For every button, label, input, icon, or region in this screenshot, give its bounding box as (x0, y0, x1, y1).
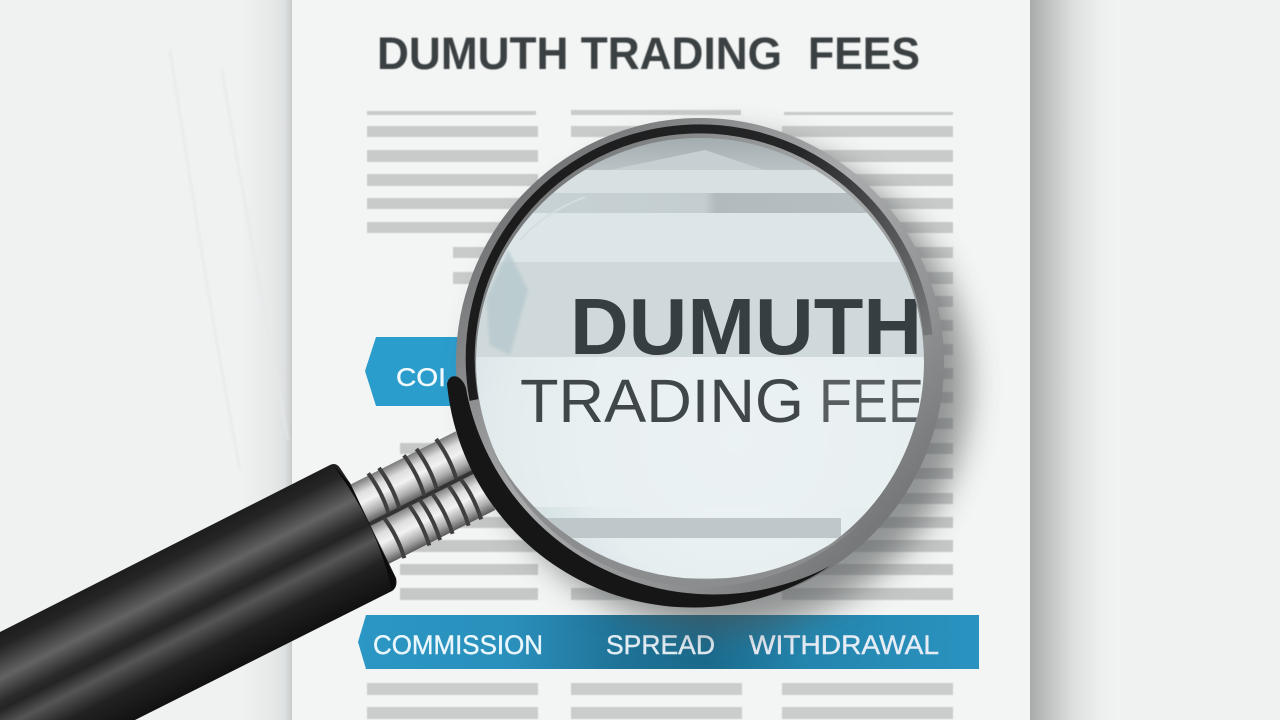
glass (472, 134, 928, 590)
black grip (0, 464, 396, 720)
banner tag: partly hidden commission label: COI (396, 364, 446, 392)
title: FEES (808, 28, 920, 79)
banner: fee categories: SPREAD (606, 630, 715, 660)
lens drop shadow (476, 138, 968, 630)
inner black ring (470, 129, 928, 400)
text lines: lower columns (367, 683, 953, 719)
title: DUMUTH TRADING (377, 28, 782, 79)
icon: magnifying glass lens (447, 128, 960, 608)
banner: fee categories: WITHDRAWAL (749, 630, 939, 660)
magnified content (476, 138, 924, 580)
banner tag: partly hidden commission label (365, 337, 470, 406)
banner: fee categories (358, 615, 979, 669)
icon: magnifying glass handle (0, 430, 496, 720)
banner: fee categories: COMMISSION (373, 630, 543, 660)
lower black outer ring (447, 376, 830, 608)
lower grey inner rim (493, 450, 860, 587)
magnified title: FEES (819, 367, 960, 435)
magnified title: DUMUTH (570, 282, 922, 371)
text lines: upper columns (367, 110, 953, 429)
magnified title: TRADING (520, 367, 804, 435)
grey rim (466, 128, 934, 596)
panel: document page (292, 0, 1030, 720)
text lines: middle columns (400, 443, 953, 600)
metal collar (334, 430, 496, 573)
magnified title (521, 299, 921, 422)
